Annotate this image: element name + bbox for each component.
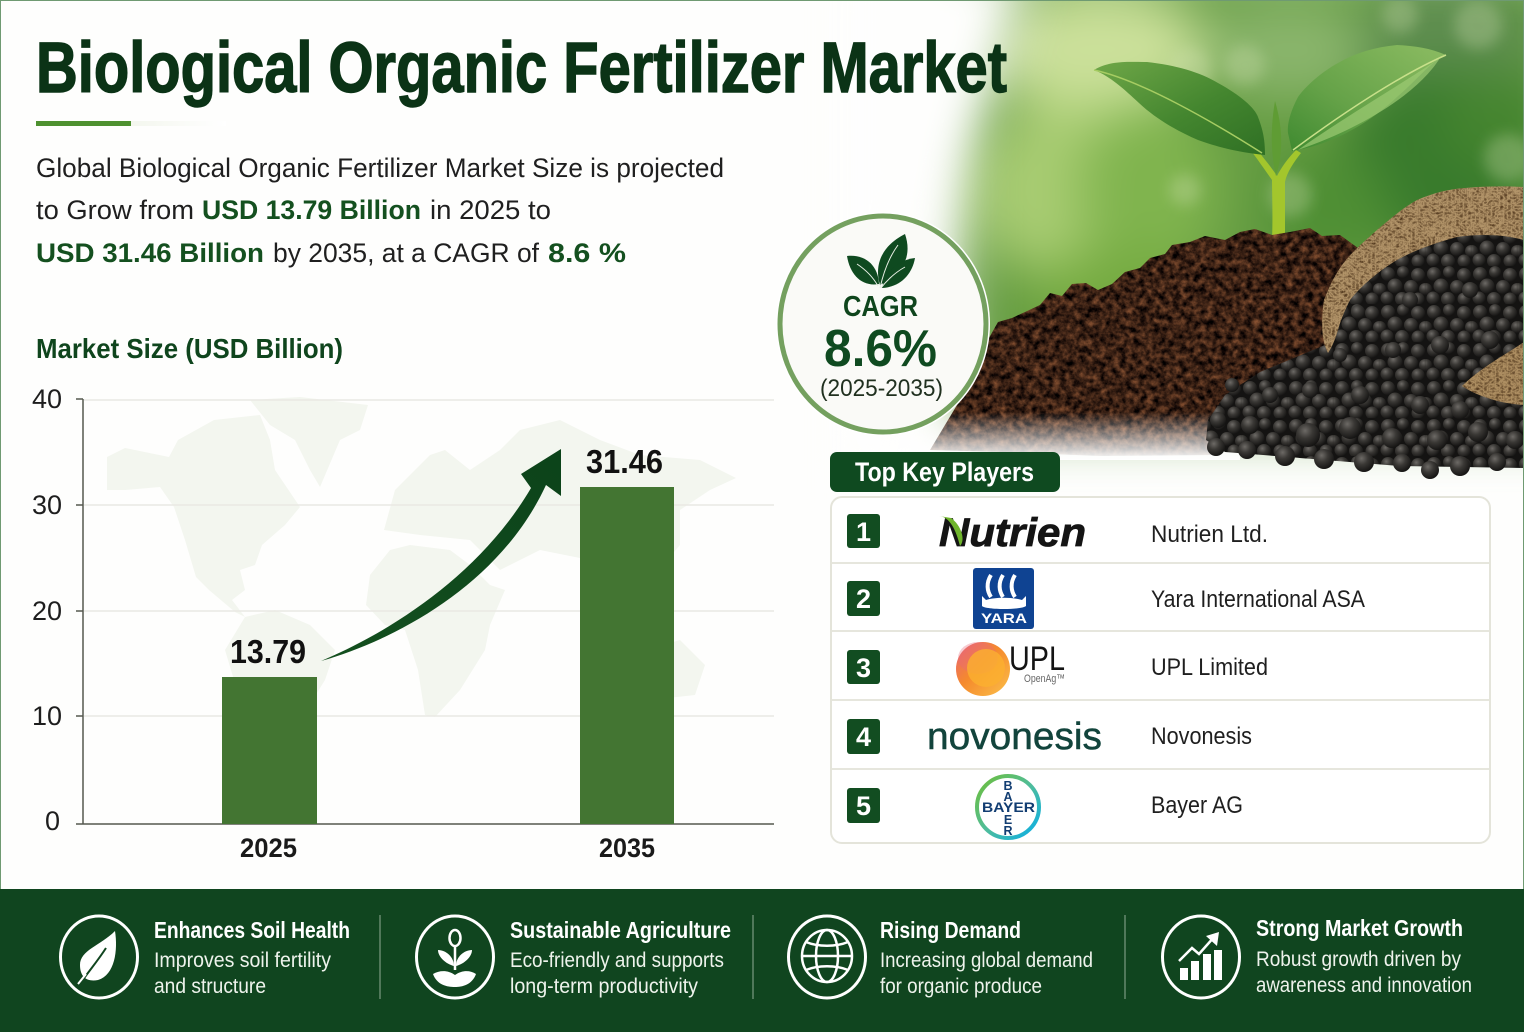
benefit: soil health: and structure xyxy=(154,975,266,998)
logo: Bayer: E xyxy=(1004,813,1012,827)
rank badge 4: 4 xyxy=(856,722,871,752)
chart heading: Market Size (USD Billion) xyxy=(36,333,343,364)
logo: novonesis: novonesis xyxy=(927,716,1102,758)
axes xyxy=(76,399,774,824)
logo: UPL: OpenAg™ xyxy=(1024,673,1065,685)
growth arrow xyxy=(321,449,561,661)
rank badge 1 xyxy=(847,514,880,548)
CAGR badge xyxy=(776,212,990,436)
right leaf xyxy=(1288,45,1446,151)
intro text block: USD 13.79 Billion xyxy=(202,195,421,225)
intro text block: to Grow from xyxy=(36,195,194,225)
benefit: sustainable agriculture: Sustainable Agriculture xyxy=(510,917,731,943)
logo: UPL: UPL xyxy=(1009,640,1065,678)
rank badge 3 xyxy=(847,650,880,684)
value 31.46: 31.46 xyxy=(586,443,663,480)
y axis labels xyxy=(32,384,62,836)
benefit: market growth: Robust growth driven by xyxy=(1256,948,1461,971)
white fade below the soil xyxy=(880,412,1240,460)
y axis labels: 30 xyxy=(32,490,62,520)
y axis labels: 10 xyxy=(32,701,62,731)
benefit: market growth: Strong Market Growth xyxy=(1256,915,1463,941)
benefit: soil health: Enhances Soil Health xyxy=(154,917,350,943)
rank badge 1: 1 xyxy=(856,517,871,547)
seedling xyxy=(1094,45,1446,240)
key players heading pill xyxy=(830,452,1060,492)
hero photo: seedling, soil and fertilizer sack xyxy=(840,0,1524,480)
left leaf xyxy=(1094,62,1265,155)
intro text block: Global Biological Organic Fertilizer Market Size is projected xyxy=(36,153,724,183)
benefit: market growth xyxy=(1256,915,1472,997)
burlap sack xyxy=(1322,186,1524,353)
center bud xyxy=(1272,101,1281,176)
company names xyxy=(1151,521,1365,819)
fertilizer pellet pile xyxy=(1206,225,1524,468)
CAGR label: CAGR xyxy=(843,291,918,323)
logo: Bayer: B xyxy=(1003,779,1013,793)
bar 2035 xyxy=(580,487,674,824)
company names: Bayer AG xyxy=(1151,792,1243,819)
benefit: rising demand: Rising Demand xyxy=(880,917,1021,943)
benefit: sustainable agriculture: long-term productivity xyxy=(510,975,698,998)
rank badge 2 xyxy=(847,581,880,616)
logo: Bayer: A xyxy=(1003,790,1013,804)
bar 2025 xyxy=(222,677,317,824)
benefit: rising demand xyxy=(880,917,1093,998)
world map watermark xyxy=(107,397,736,740)
value 13.79: 13.79 xyxy=(230,633,306,670)
icon: globe xyxy=(788,916,866,998)
bokeh highlights xyxy=(1168,0,1524,217)
company names: Yara International ASA xyxy=(1151,586,1365,613)
y axis labels: 20 xyxy=(32,596,62,626)
benefit: sustainable agriculture: Eco-friendly and supports xyxy=(510,949,724,972)
bar chart: 2035 xyxy=(599,833,655,863)
blurred green foliage background xyxy=(960,0,1524,430)
soil mound xyxy=(930,228,1400,456)
front pellets xyxy=(1207,282,1524,479)
title: Biological Organic Fertilizer Market xyxy=(36,29,1007,108)
benefit: rising demand: Increasing global demand xyxy=(880,949,1093,972)
company names: Novonesis xyxy=(1151,723,1252,750)
logo: Bayer: R xyxy=(1003,824,1013,838)
logo: UPL xyxy=(956,640,1065,696)
CAGR period: (2025-2035) xyxy=(820,375,943,402)
title underline xyxy=(36,121,226,126)
benefit: soil health xyxy=(154,917,350,998)
y axis labels: 0 xyxy=(45,806,60,836)
sack lower flap xyxy=(1462,342,1524,405)
icon: leaf xyxy=(60,916,138,998)
company names: Nutrien Ltd. xyxy=(1151,521,1268,548)
intro text block: in 2025 to xyxy=(430,195,551,225)
stem xyxy=(1252,150,1301,240)
rank badge 5: 5 xyxy=(856,791,871,821)
icon: growth chart xyxy=(1162,916,1240,998)
logo: Yara xyxy=(973,568,1034,629)
company names: UPL Limited xyxy=(1151,654,1268,681)
y axis labels: 40 xyxy=(32,384,62,414)
logo: Bayer: BAYER xyxy=(982,799,1035,815)
benefit: sustainable agriculture xyxy=(510,917,731,998)
intro text block xyxy=(36,153,724,268)
x axis labels: 2025 xyxy=(240,833,297,863)
logo: Yara: YARA xyxy=(981,610,1027,626)
icon: sprout in hand xyxy=(416,916,494,998)
bottom benefits band xyxy=(0,889,1524,1032)
white fade on the left of the photo xyxy=(840,0,1030,480)
benefit: market growth: awareness and innovation xyxy=(1256,974,1472,997)
intro text block: 8.6 % xyxy=(548,238,626,268)
intro text block: by 2035, at a CAGR of xyxy=(273,238,539,268)
icon: leaves xyxy=(847,234,915,288)
rank badge 2: 2 xyxy=(856,584,871,614)
logo: Nutrien: Nutrien xyxy=(939,511,1086,555)
grid lines xyxy=(84,400,774,716)
bar chart xyxy=(32,384,774,863)
rank badge 5 xyxy=(847,788,880,823)
intro text block: USD 31.46 Billion xyxy=(36,238,264,268)
logo: Bayer xyxy=(977,776,1039,838)
rank badge 4 xyxy=(847,719,880,754)
key players table xyxy=(831,497,1490,843)
benefit: soil health: Improves soil fertility xyxy=(154,949,331,972)
key players heading pill: Top Key Players xyxy=(855,457,1034,487)
benefit: rising demand: for organic produce xyxy=(880,975,1042,998)
rank badge 3: 3 xyxy=(856,653,871,683)
CAGR value: 8.6% xyxy=(824,320,937,378)
